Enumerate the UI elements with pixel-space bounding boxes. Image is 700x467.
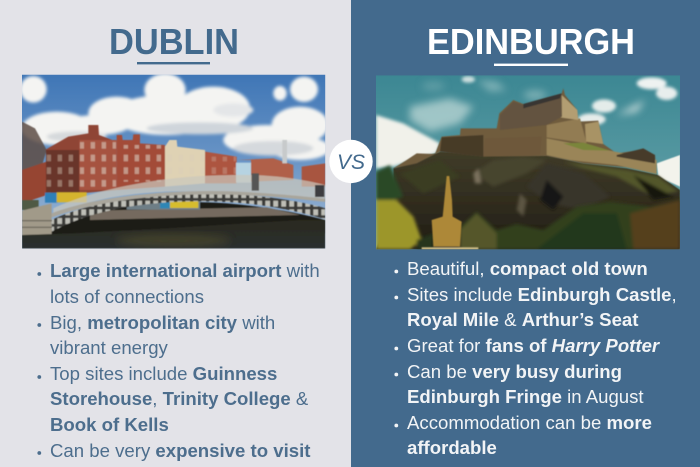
heading: Dublin: DUBLIN xyxy=(109,21,239,62)
abutment xyxy=(22,203,52,235)
list: Edinburgh points: Accommodation can be more xyxy=(407,412,652,433)
list: Edinburgh points: Edinburgh Fringe in August xyxy=(407,386,644,407)
list: Edinburgh points: Beautiful, compact old town xyxy=(407,258,648,279)
lattice arch xyxy=(52,194,325,232)
water xyxy=(22,220,325,249)
figures xyxy=(252,173,259,191)
far tree xyxy=(22,122,47,175)
foliage xyxy=(376,165,403,207)
buildings xyxy=(22,162,47,203)
far quay xyxy=(90,207,300,220)
list: Dublin points: lots of connections xyxy=(50,286,204,307)
list: Edinburgh points: Can be very busy during xyxy=(407,361,622,382)
list: Dublin points xyxy=(37,260,320,461)
photo: Dublin Ha'penny Bridge xyxy=(20,73,330,249)
list: Dublin points: vibrant energy xyxy=(50,337,169,358)
photo: Edinburgh Castle xyxy=(376,75,680,249)
list: Dublin points: Big, metropolitan city with xyxy=(50,312,275,333)
list: Dublin points: Can be very expensive to visit xyxy=(50,440,310,461)
bridge railing xyxy=(53,175,325,217)
list: Dublin points: Top sites include Guinness xyxy=(50,363,277,384)
under-bridge dark xyxy=(50,202,325,237)
list: Dublin points: Book of Kells xyxy=(50,414,169,435)
list: Edinburgh points: Sites include Edinburgh Castle, xyxy=(407,284,677,305)
VS badge xyxy=(329,140,373,183)
list: Edinburgh points xyxy=(394,258,677,458)
panel: Dublin background xyxy=(0,0,351,467)
rock xyxy=(376,152,680,249)
VS badge: VS xyxy=(337,151,365,174)
castle walls xyxy=(393,88,657,174)
list: Edinburgh points: Royal Mile & Arthur’s Seat xyxy=(407,309,638,330)
lamp xyxy=(282,140,287,163)
list: Dublin points: Large international airport with xyxy=(50,260,320,281)
list: Edinburgh points: Great for fans of Harry Potter xyxy=(407,335,661,356)
colored stalls xyxy=(45,193,58,203)
list: Edinburgh points: affordable xyxy=(407,437,497,458)
panel: Edinburgh background xyxy=(351,0,700,467)
list: Dublin points: Storehouse, Trinity College & xyxy=(50,388,309,409)
fountain xyxy=(432,176,462,247)
heading: Edinburgh: EDINBURGH xyxy=(427,21,635,62)
